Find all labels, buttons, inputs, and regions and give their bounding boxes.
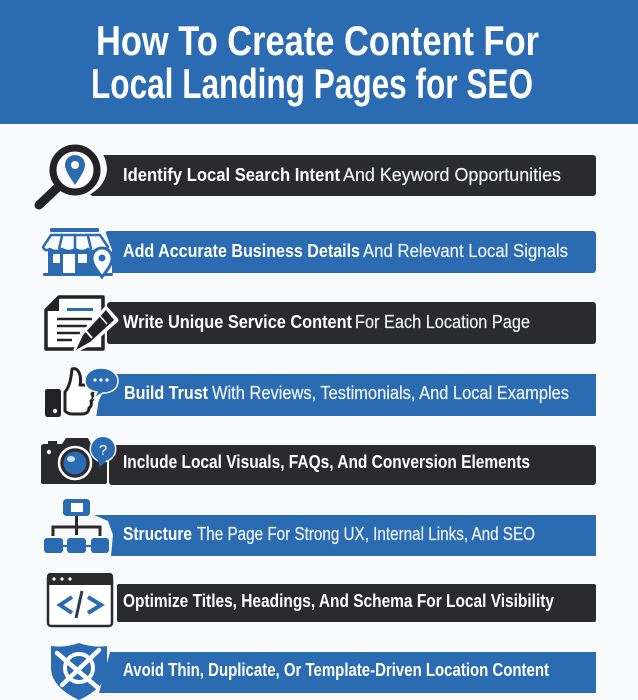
icon: magnifying glass with location pin bbox=[39, 137, 107, 205]
icon: thumbs up with speech bubble bbox=[45, 366, 118, 418]
step 8: avoid thin content bbox=[51, 643, 596, 700]
header banner bbox=[0, 0, 638, 124]
step 1: identify local search intent bbox=[39, 137, 596, 205]
step 5: include local visuals bbox=[41, 436, 596, 485]
step 6 text: Structure bbox=[123, 524, 192, 544]
step 7: optimize titles bbox=[47, 573, 596, 626]
step 1 text bbox=[123, 165, 561, 185]
icon: camera with question bubble bbox=[41, 436, 116, 484]
step 6: structure the page bbox=[44, 499, 596, 556]
step 1 text: Identify Local Search Intent bbox=[123, 165, 340, 185]
step 2: add accurate business details bbox=[42, 228, 596, 277]
step 3 text: For Each Location Page bbox=[355, 312, 530, 332]
icon: site hierarchy diagram bbox=[44, 499, 109, 553]
title bbox=[91, 17, 539, 107]
step 4 text: With Reviews, Testimonials, And Local Examples bbox=[212, 383, 569, 403]
step 2 text: And Relevant Local Signals bbox=[363, 241, 568, 261]
step 4 text: Build Trust bbox=[124, 383, 208, 403]
step 3 text bbox=[123, 312, 530, 332]
icon: camera with question bubble: ? bbox=[99, 442, 107, 459]
step 5 text: Include Local Visuals, FAQs, And Conversion Elements bbox=[123, 452, 530, 472]
step 6 text: The Page For Strong UX, Internal Links, And SEO bbox=[197, 524, 535, 544]
title: How To Create Content For bbox=[96, 17, 539, 64]
step 2 text bbox=[123, 241, 568, 261]
icon: browser window with code brackets bbox=[47, 573, 113, 626]
step 8 text: Avoid Thin, Duplicate, Or Template-Driven Location Content bbox=[123, 660, 549, 680]
step 4: build trust bbox=[45, 366, 596, 418]
icon: document with pencil bbox=[46, 297, 116, 350]
step 2 text: Add Accurate Business Details bbox=[123, 241, 360, 261]
step 1 text: And Keyword Opportunities bbox=[343, 165, 561, 185]
icon: storefront with location pin bbox=[42, 228, 113, 277]
icon: shield with crossed out circle bbox=[51, 643, 107, 700]
step 3 text: Write Unique Service Content bbox=[123, 312, 352, 332]
step 3: write unique service content bbox=[46, 297, 596, 350]
step 7 text: Optimize Titles, Headings, And Schema For Local Visibility bbox=[123, 591, 554, 611]
